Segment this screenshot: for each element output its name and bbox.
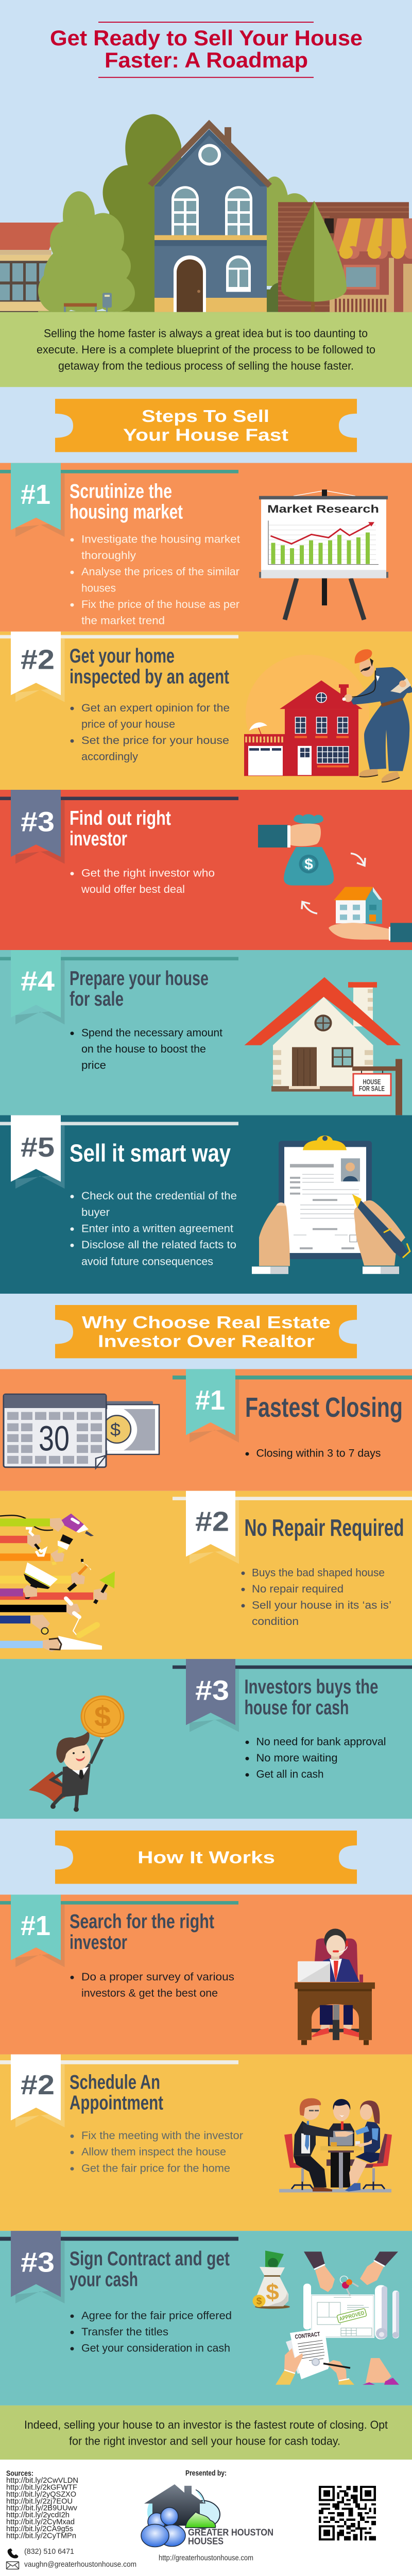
step 5 heading: Sell it smart way	[70, 1140, 231, 1167]
how 2 bullets: Allow them inspect the house	[81, 2146, 226, 2158]
illustration: money bag exchanged for house	[258, 814, 412, 942]
step 3 bullets: would offer best deal	[81, 883, 185, 895]
heading banner: why choose: Why Choose Real Estate	[82, 1313, 331, 1332]
reason 3 heading	[244, 1675, 378, 1719]
step 3 bullets	[70, 867, 215, 895]
ribbon: number 3	[0, 790, 238, 864]
panel: step 5	[0, 1115, 412, 1294]
step 2 bullets: Set the price for your house	[81, 734, 229, 747]
panel: footer	[0, 2460, 412, 2576]
ribbon: number 5: #5	[21, 1131, 55, 1163]
step 1 heading: Scrutinize the	[70, 480, 172, 502]
panel: closing text: Indeed, selling your house to an investor is the fastest route of closing. Opt	[24, 2418, 388, 2431]
step 4 bullets: price	[81, 1059, 106, 1072]
sources list: http://bit.ly/2zj7EOU	[6, 2497, 73, 2505]
step 4 heading	[70, 967, 209, 1010]
step 2 bullets: Get an expert opinion for the	[81, 702, 230, 714]
panel: closing text	[0, 2405, 412, 2460]
illustration: market research board: Market Research	[267, 503, 379, 515]
panel: intro text: execute. Here is a complete blueprint of the process to be followed to	[37, 344, 375, 356]
step 4 heading: for sale	[70, 988, 124, 1010]
step 1 bullets: houses	[81, 582, 116, 594]
illustration: three people in a meeting	[279, 2098, 392, 2193]
step 1 bullets: Fix the price of the house as per	[81, 598, 239, 611]
illustration: contract signing and cash bag: CONTRACT	[295, 2331, 321, 2341]
tool: hammer	[68, 1559, 91, 1590]
illustration: house for sale	[244, 977, 402, 1115]
title: Get Ready to Sell Your House	[50, 26, 363, 50]
ribbon: reason number 3	[173, 1659, 412, 1732]
heading banner: how it works: How It Works	[138, 1848, 275, 1867]
step 1 bullets: the market trend	[81, 615, 165, 626]
step 2 heading: inspected by an agent	[70, 665, 229, 688]
tool: drill	[60, 1514, 94, 1536]
step 2 bullets	[70, 702, 230, 762]
step 4 bullets	[70, 1027, 222, 1072]
panel: closing text: for the right investor and sell your house for cash today.	[69, 2435, 340, 2447]
tool: squeegee	[24, 1563, 58, 1599]
step 1 bullets: Investigate the housing market	[81, 533, 240, 545]
ribbon: number 1: #1	[21, 479, 50, 510]
reason 2 bullets: No repair required	[252, 1583, 344, 1595]
ribbon: number 2: #2	[21, 644, 55, 675]
ribbon: how number 1: #1	[21, 1910, 50, 1941]
sources list: http://bit.ly/2kGFWTF	[6, 2483, 77, 2492]
how 2 heading: Appointment	[70, 2092, 163, 2114]
illustration: calendar and banknote: $	[110, 1420, 121, 1439]
illustration: flying businessman with coin: $	[94, 1701, 111, 1733]
illustration: money bag exchanged for house: $	[304, 856, 313, 873]
ribbon: number 4: #4	[21, 965, 55, 996]
reason 3 bullets: Get all in cash	[256, 1768, 324, 1781]
panel: step 3	[0, 790, 412, 950]
title	[50, 22, 363, 78]
icon: phone	[8, 2548, 18, 2558]
illustration: contract signing and cash bag: $	[266, 2279, 279, 2305]
how 1 bullets	[70, 1971, 234, 1999]
panel: reason 3	[0, 1659, 412, 1819]
illustration: house for sale: FOR SALE	[359, 1085, 385, 1093]
heading banner: why choose	[55, 1305, 357, 1358]
reason 2 bullets: Buys the bad shaped house	[252, 1567, 385, 1579]
sources list: http://bit.ly/2yQSZXO	[6, 2490, 76, 2499]
logo: Greater Houston Houses: GREATER HOUSTON	[188, 2527, 273, 2537]
contact email: vaughn@greaterhoustonhouse.com	[24, 2560, 136, 2569]
sources list: http://bit.ly/2CyMxad	[6, 2518, 75, 2526]
step 1 heading	[70, 480, 183, 523]
reason 3 bullets: No more waiting	[256, 1752, 338, 1764]
step 2 bullets: price of your house	[81, 718, 175, 730]
contact phone: (832) 510 6471	[24, 2547, 74, 2556]
tool: tape measure	[41, 1628, 48, 1634]
ribbon: number 1	[0, 463, 238, 537]
how 1 bullets: investors & get the best one	[81, 1987, 218, 1999]
how 3 bullets	[70, 2310, 232, 2354]
how 2 bullets: Fix the meeting with the investor	[81, 2130, 243, 2142]
tool: paint brush	[52, 1534, 73, 1565]
panel: step 1	[0, 463, 412, 632]
illustration: calendar and banknote	[4, 1394, 159, 1468]
ribbon: how number 1	[0, 1895, 238, 1967]
ribbon: how number 2	[0, 2055, 238, 2127]
illustration: calendar and banknote: 30	[39, 1418, 70, 1458]
ribbon: reason number 1: #1	[195, 1384, 225, 1416]
panel: intro text	[0, 312, 412, 387]
step 3 bullets: Get the right investor who	[81, 867, 215, 879]
reason 2 bullets: Sell your house in its ‘as is’	[252, 1599, 391, 1611]
reason 1 bullet: Closing within 3 to 7 days	[256, 1447, 381, 1460]
reason 2 bullets	[241, 1567, 391, 1628]
step 4 bullets: on the house to boost the	[81, 1043, 206, 1055]
heading banner: steps: Steps To Sell	[142, 407, 269, 426]
panel: reason 1	[0, 1369, 412, 1491]
how 3 heading	[70, 2247, 230, 2291]
sources list: http://bit.ly/2CyTMPn	[6, 2532, 76, 2540]
tool: wrench	[26, 1529, 45, 1555]
title: Faster: A Roadmap	[105, 48, 308, 73]
illustration: market research board	[259, 489, 388, 620]
illustration: contract signing and cash bag	[252, 2250, 399, 2385]
step 2 bullets: accordingly	[81, 751, 138, 762]
illustration: house for sale: HOUSE	[363, 1078, 381, 1086]
sources list: http://bit.ly/2CA9g5s	[6, 2524, 73, 2533]
ribbon: how number 3	[0, 2231, 238, 2303]
ribbon: how number 3: #3	[21, 2247, 55, 2278]
illustration: agent at desk	[295, 1929, 375, 2045]
heading banner: why choose: Investor Over Realtor	[98, 1332, 315, 1351]
step 5 bullets: Check out the credential of the	[81, 1190, 237, 1202]
step 5 bullets	[70, 1190, 237, 1267]
tool: saw	[49, 1636, 102, 1650]
step 2 heading: Get your home	[70, 645, 175, 667]
step 1 bullets	[70, 533, 240, 626]
sources list: http://bit.ly/2CwVLDN	[6, 2476, 78, 2485]
step 1 bullets: thoroughly	[81, 550, 136, 562]
step 2 heading	[70, 645, 229, 688]
reason 2 bullets: condition	[252, 1615, 299, 1628]
ribbon: number 4	[0, 950, 238, 1025]
illustration: flying businessman with coin	[29, 1696, 124, 1812]
how 1 heading: Search for the right	[70, 1910, 214, 1933]
logo: Greater Houston Houses	[141, 2484, 273, 2547]
sources list	[6, 2469, 78, 2540]
step 5 bullets: Enter into a written agreement	[81, 1223, 233, 1234]
panel: intro text: Selling the home faster is always a great idea but is too daunting to	[44, 327, 368, 340]
how 3 bullets: Transfer the titles	[81, 2326, 168, 2338]
how 2 heading: Schedule An	[70, 2071, 160, 2093]
reason 3 bullets: No need for bank approval	[256, 1736, 386, 1748]
step 1 heading: housing market	[70, 500, 183, 523]
how 3 bullets: Agree for the fair price offered	[81, 2310, 232, 2321]
panel: how step 1	[0, 1895, 412, 2055]
illustration: hands signing clipboard	[252, 1136, 410, 1274]
website: http://greaterhoustonhouse.com	[159, 2554, 253, 2562]
ribbon: reason number 2	[173, 1491, 412, 1564]
how 1 heading: investor	[70, 1931, 127, 1954]
step 5 bullets: avoid future consequences	[81, 1256, 213, 1267]
step 4 heading: Prepare your house	[70, 967, 209, 990]
sources list: http://bit.ly/2B9UUwv	[6, 2504, 77, 2513]
icon: envelope	[6, 2562, 19, 2569]
heading banner: steps	[55, 399, 357, 452]
how 2 bullets: Get the fair price for the home	[81, 2162, 230, 2174]
ribbon: reason number 2: #2	[195, 1505, 229, 1537]
illustration: arms holding repair tools	[0, 1514, 115, 1652]
how 3 heading: Sign Contract and get	[70, 2247, 230, 2270]
how 2 bullets	[70, 2130, 243, 2174]
QR code	[319, 2486, 376, 2540]
illustration: contract signing and cash bag: $	[256, 2296, 262, 2307]
how 1 bullets: Do a proper survey of various	[81, 1971, 234, 1983]
step 3 heading: investor	[70, 827, 127, 850]
ribbon: how number 2: #2	[21, 2069, 55, 2100]
step 3 heading: Find out right	[70, 807, 171, 829]
how 3 heading: your cash	[70, 2268, 138, 2291]
step 5 bullets: buyer	[81, 1206, 110, 1218]
ribbon: number 2	[0, 632, 238, 702]
tool: trowel	[95, 1571, 115, 1603]
panel: intro text: getaway from the tedious process of selling the house faster.	[58, 360, 354, 372]
panel: how step 2	[0, 2055, 412, 2231]
panel: reason 2	[0, 1491, 412, 1659]
reason 3 heading: house for cash	[244, 1696, 349, 1719]
illustration: agent inspecting red house	[244, 649, 412, 782]
ribbon: number 5	[0, 1115, 238, 1189]
reason 3 bullets	[245, 1736, 386, 1781]
panel: how step 3	[0, 2231, 412, 2405]
step 3 heading	[70, 807, 171, 850]
ribbon: number 3: #3	[21, 806, 55, 837]
how 2 heading	[70, 2071, 163, 2114]
illustration: neighbourhood scene with blue house	[0, 114, 412, 314]
panel: step 2	[0, 632, 412, 790]
heading banner: how it works	[55, 1831, 357, 1884]
ribbon: reason number 1	[173, 1369, 412, 1443]
how 3 bullets: Get your consideration in cash	[81, 2342, 230, 2354]
heading banner: steps: Your House Fast	[123, 426, 288, 445]
presented by: Presented by:	[185, 2469, 227, 2478]
step 1 bullets: Analyse the prices of the similar	[81, 566, 239, 578]
step 4 bullets: Spend the necessary amount	[81, 1027, 222, 1039]
step 5 bullets: Disclose all the related facts to	[81, 1239, 236, 1251]
sources list: Sources:	[6, 2469, 33, 2478]
sources list: http://bit.ly/2ycdI2h	[6, 2511, 70, 2519]
logo: Greater Houston Houses: HOUSES	[188, 2536, 224, 2547]
ribbon: reason number 3: #3	[195, 1675, 229, 1706]
panel: step 4	[0, 950, 412, 1115]
illustration: contract signing and cash bag: APPROVED	[339, 2310, 365, 2322]
tool: paint roller	[66, 1598, 97, 1636]
how 1 heading	[70, 1910, 214, 1954]
